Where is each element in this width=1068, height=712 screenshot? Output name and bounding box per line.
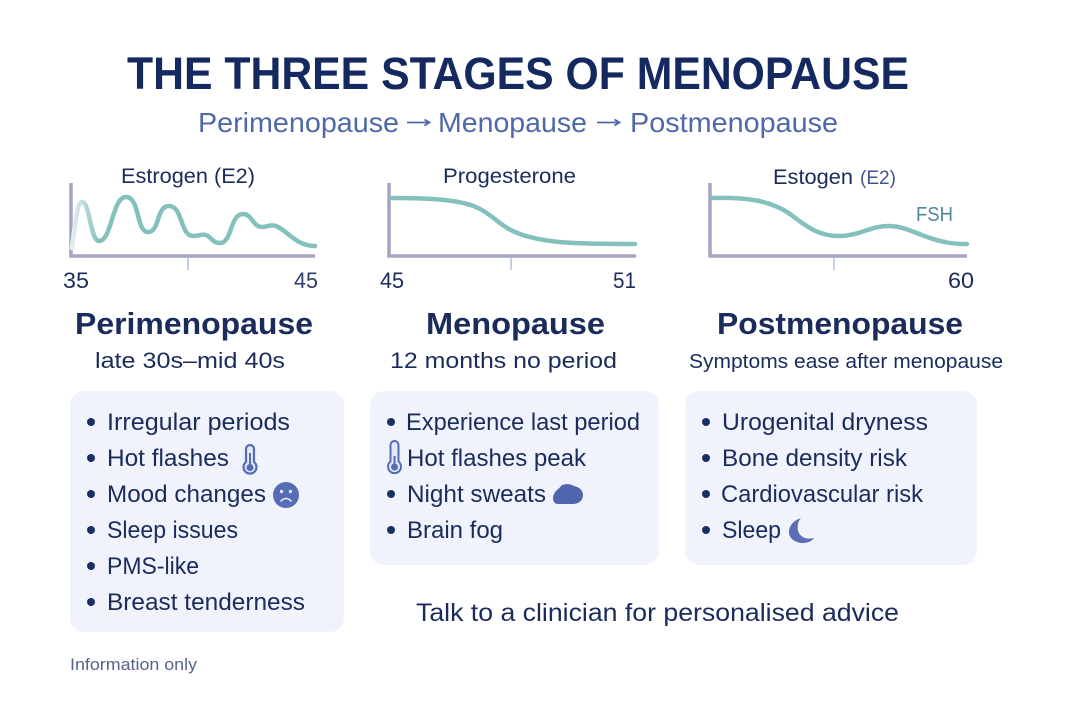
curve: progesterone bbox=[391, 198, 635, 244]
symptom: Experience last period: Experience last period bbox=[406, 409, 640, 436]
chart: progesterone decline in menopause bbox=[380, 165, 636, 293]
panel: postmenopause symptoms bbox=[685, 391, 977, 565]
symptom: Sleep: Sleep bbox=[722, 517, 781, 544]
symptom: Irregular periods: Irregular periods bbox=[107, 409, 290, 436]
axis label: 35: 35 bbox=[63, 268, 89, 293]
symptom: Breast tenderness: Breast tenderness bbox=[107, 589, 305, 616]
symptom: Cardiovascular risk: Cardiovascular risk bbox=[721, 481, 924, 508]
symptom: Night sweats: Night sweats bbox=[407, 481, 546, 508]
chart label: Estogen (E2): Estogen bbox=[773, 166, 853, 189]
axis label: 60: 60 bbox=[948, 268, 974, 293]
heading: Postmenopause: Postmenopause bbox=[717, 306, 963, 341]
symptom: PMS-like: PMS-like bbox=[107, 553, 199, 580]
chart label: Estrogen (E2): Estrogen (E2) bbox=[121, 165, 255, 188]
subtitle: stage sequence: Postmenopause bbox=[630, 107, 838, 138]
footnote: Information only bbox=[70, 655, 198, 674]
age range: late 30s–mid 40s: late 30s–mid 40s bbox=[95, 348, 285, 373]
symptom: Mood changes: Mood changes bbox=[107, 481, 266, 508]
symptom: Hot flashes: Hot flashes bbox=[107, 445, 229, 472]
chart label: Estogen (E2) bbox=[773, 166, 896, 189]
symptom: Bone density risk: Bone density risk bbox=[722, 445, 908, 472]
callout: clinician advice: Talk to a clinician for personalised advice bbox=[416, 599, 899, 627]
curve: estogen / FSH bbox=[712, 198, 967, 244]
symptom: Hot flashes peak: Hot flashes peak bbox=[407, 445, 587, 472]
panel: menopause symptoms bbox=[370, 391, 659, 565]
icon: crescent moon bbox=[789, 518, 814, 543]
chart: estrogen fluctuation in perimenopause bbox=[63, 165, 318, 293]
subtitle: stage sequence: Menopause bbox=[438, 107, 587, 138]
icon: sad face bbox=[273, 482, 299, 508]
definition: 12 months no period: 12 months no period bbox=[390, 348, 617, 373]
axis label: 45: 45 bbox=[380, 268, 404, 293]
axis label: 45: 45 bbox=[294, 268, 318, 293]
description: Symptoms ease after menopause: Symptoms ease after menopause bbox=[689, 351, 1003, 373]
icon: thermometer bbox=[388, 441, 401, 473]
chart label: Estogen (E2): (E2) bbox=[860, 168, 896, 189]
heading: Perimenopause: Perimenopause bbox=[75, 306, 313, 341]
symptom: Urogenital dryness: Urogenital dryness bbox=[722, 409, 928, 436]
subtitle: stage sequence bbox=[198, 107, 838, 138]
chart label: FSH: FSH bbox=[916, 204, 953, 226]
chart label: Progesterone: Progesterone bbox=[443, 165, 576, 188]
icon: cloud bbox=[553, 484, 583, 504]
chart: estrogen and FSH in postmenopause bbox=[710, 166, 974, 293]
panel: perimenopause symptoms bbox=[70, 391, 344, 632]
axis label: 51: 51 bbox=[613, 268, 636, 293]
heading: Menopause: Menopause bbox=[426, 306, 605, 341]
icon: thermometer bbox=[244, 445, 256, 474]
curve: estrogen bbox=[72, 202, 99, 248]
symptom: Sleep issues: Sleep issues bbox=[107, 517, 238, 544]
subtitle: stage sequence: Perimenopause bbox=[198, 107, 399, 138]
symptom: Brain fog: Brain fog bbox=[407, 517, 503, 544]
title: THE THREE STAGES OF MENOPAUSE bbox=[127, 48, 909, 99]
